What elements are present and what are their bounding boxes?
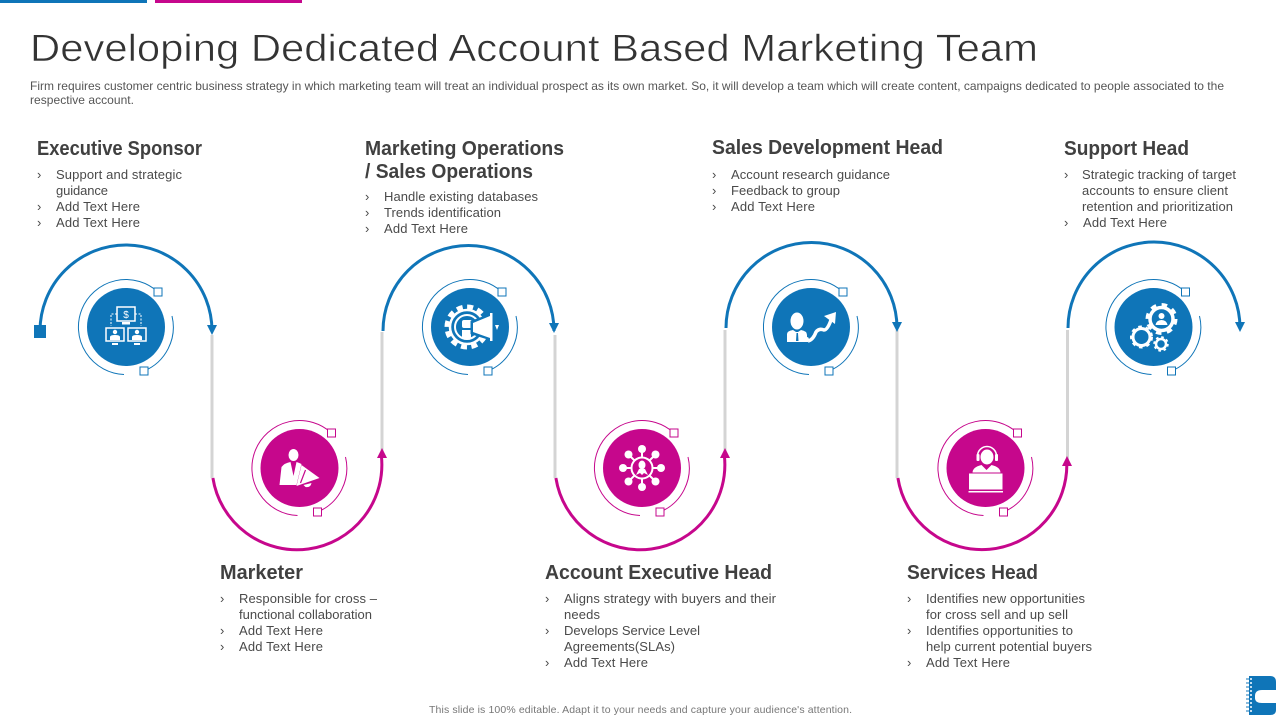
bullet list: needs	[564, 607, 600, 622]
intro text: Firm requires customer centric business strategy in which marketing team will treat an individual prospect as its own market. So, it will develop a team which will create content, campaigns dedicated to people associated to the	[30, 79, 1224, 93]
bullet list: Trends identification	[384, 205, 501, 220]
bullet list: Add Text Here	[564, 655, 648, 670]
icon: gears with person	[1106, 280, 1201, 375]
bullet list: Add Text Here	[239, 623, 323, 638]
icon: gear with megaphone	[422, 280, 517, 375]
heading: Support Head	[1064, 138, 1189, 160]
panel: Marketer	[220, 562, 378, 654]
bullet list: Add Text Here	[384, 221, 468, 236]
bullet list: ›	[365, 221, 369, 236]
heading: Sales Development Head	[712, 137, 943, 159]
bullet list: ›	[907, 623, 911, 638]
bullet list: ›	[1064, 215, 1068, 230]
bullet list: Add Text Here	[56, 215, 140, 230]
bullet list: ›	[907, 591, 911, 606]
bullet list	[365, 189, 538, 236]
bullet list: ›	[37, 215, 41, 230]
bullet list: ›	[220, 639, 224, 654]
bullet list: Support and strategic	[56, 167, 182, 182]
bullet list: ›	[365, 189, 369, 204]
bullet list: ›	[545, 655, 549, 670]
panel: Services Head	[907, 562, 1092, 670]
panel: Account Executive Head	[545, 562, 777, 670]
bullet list: Aligns strategy with buyers and their	[564, 591, 777, 606]
bullet list: ›	[545, 623, 549, 638]
bullet list: Strategic tracking of target	[1082, 167, 1236, 182]
bullet list	[37, 167, 182, 230]
grey connector lines	[212, 330, 1068, 478]
bullet list	[712, 167, 890, 214]
bullet list: retention and prioritization	[1082, 199, 1233, 214]
footer note: This slide is 100% editable. Adapt it to your needs and capture your audience's attention.	[429, 704, 852, 716]
heading: Marketer	[220, 562, 303, 584]
icon: person with growth arrow	[763, 280, 858, 375]
bullet list: Agreements(SLAs)	[564, 639, 675, 654]
bullet list: ›	[220, 591, 224, 606]
bullet list: Add Text Here	[731, 199, 815, 214]
heading: Account Executive Head	[545, 562, 772, 584]
bullet list: Develops Service Level	[564, 623, 700, 638]
bullet list: ›	[712, 183, 716, 198]
panel: Executive Sponsor	[37, 138, 202, 230]
heading: Executive Sponsor	[37, 138, 202, 160]
bullet list: help current potential buyers	[926, 639, 1092, 654]
serpentine arc 1: blue with start square and arrow	[34, 245, 217, 338]
bullet list: Add Text Here	[1083, 215, 1167, 230]
serpentine arc 4: magenta with arrow	[556, 448, 730, 550]
serpentine arc 3: blue with arrow	[383, 246, 559, 333]
intro text: respective account.	[30, 93, 134, 107]
serpentine arc 2: magenta with arrow	[213, 448, 387, 550]
bullet list: Feedback to group	[731, 183, 840, 198]
icon: brand logo	[1246, 676, 1276, 715]
serpentine arc 5: blue with arrow	[726, 243, 902, 332]
icon: account network	[594, 421, 689, 516]
bullet list	[545, 591, 777, 670]
bullet list: ›	[545, 591, 549, 606]
title: Developing Dedicated Account Based Marketing Team	[30, 28, 1038, 70]
bullet list: ›	[365, 205, 369, 220]
bullet list	[1064, 167, 1236, 230]
heading: / Sales Operations	[365, 161, 533, 183]
serpentine arc 6: magenta with arrow	[898, 456, 1072, 550]
icon: marketer with megaphone	[252, 421, 347, 516]
intro text	[30, 79, 1224, 107]
bullet list: functional collaboration	[239, 607, 372, 622]
bullet list: Add Text Here	[239, 639, 323, 654]
icon: executive sponsor monitors: $	[123, 310, 129, 321]
bullet list: Handle existing databases	[384, 189, 538, 204]
bullet list: ›	[1064, 167, 1068, 182]
heading: Marketing Operations	[365, 138, 564, 160]
bullet list: Add Text Here	[56, 199, 140, 214]
panel: Support Head	[1064, 138, 1236, 230]
panel: Sales Development Head	[712, 137, 943, 214]
bullet list: ›	[907, 655, 911, 670]
bullet list	[907, 591, 1092, 670]
bullet list: ›	[712, 199, 716, 214]
bullet list: for cross sell and up sell	[926, 607, 1068, 622]
bullet list: Identifies opportunities to	[926, 623, 1073, 638]
bullet list: Identifies new opportunities	[926, 591, 1086, 606]
top accent bars	[0, 0, 302, 3]
icon: support agent with headset and laptop	[938, 421, 1033, 516]
heading: Services Head	[907, 562, 1038, 584]
bullet list: ›	[712, 167, 716, 182]
bullet list: ›	[37, 167, 41, 182]
bullet list: ›	[37, 199, 41, 214]
bullet list: Responsible for cross –	[239, 591, 378, 606]
bullet list: Account research guidance	[731, 167, 890, 182]
bullet list: ›	[220, 623, 224, 638]
icon: executive sponsor monitors	[78, 280, 173, 375]
heading	[365, 138, 564, 183]
panel: Marketing Operations / Sales Operations	[365, 138, 564, 236]
bullet list: guidance	[56, 183, 108, 198]
bullet list	[220, 591, 378, 654]
bullet list: Add Text Here	[926, 655, 1010, 670]
serpentine arc 7: blue with arrow	[1068, 242, 1245, 332]
bullet list: accounts to ensure client	[1082, 183, 1228, 198]
